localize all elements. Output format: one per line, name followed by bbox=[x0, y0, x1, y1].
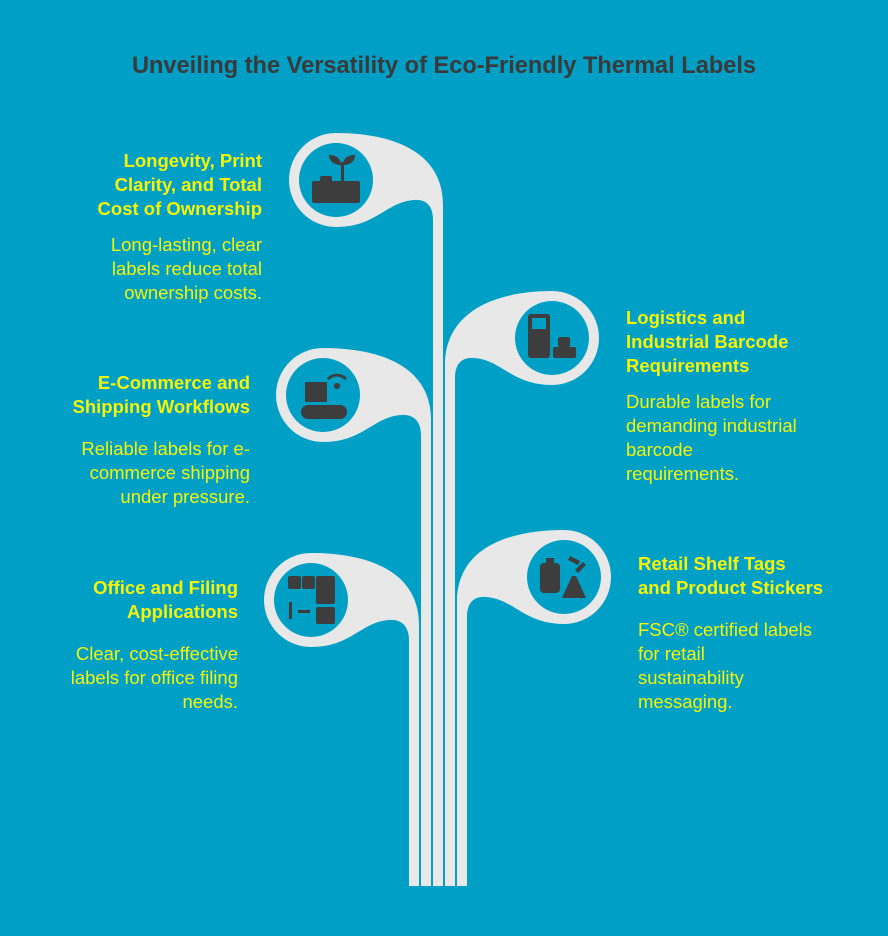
text: longevity bbox=[98, 150, 262, 303]
text: longevity: Cost of Ownership bbox=[98, 198, 262, 219]
text: longevity: Clarity, and Total bbox=[115, 174, 262, 195]
icon: kiosk bbox=[528, 314, 576, 358]
text: logistics: demanding industrial bbox=[626, 415, 797, 436]
title: Unveiling the Versatility of Eco-Friendly Thermal Labels bbox=[132, 53, 756, 79]
text: office: Clear, cost-effective bbox=[76, 643, 238, 664]
text: logistics: Requirements bbox=[626, 355, 749, 376]
icon: retail bbox=[540, 556, 586, 598]
text: office: Applications bbox=[127, 601, 238, 622]
text: office: labels for office filing bbox=[71, 667, 238, 688]
icon: office bbox=[288, 576, 335, 624]
text: office bbox=[71, 577, 238, 712]
stem: logistics bbox=[445, 291, 599, 886]
text: e-commerce: under pressure. bbox=[120, 486, 250, 507]
text: retail: for retail bbox=[638, 643, 705, 664]
text: e-commerce: Reliable labels for e- bbox=[81, 438, 250, 459]
text: logistics bbox=[626, 307, 797, 484]
text: retail: and Product Stickers bbox=[638, 577, 823, 598]
text: longevity: ownership costs. bbox=[124, 282, 262, 303]
icon: conveyor wifi bbox=[301, 374, 347, 419]
stem: office bbox=[264, 553, 419, 886]
text: logistics: barcode bbox=[626, 439, 693, 460]
text: e-commerce: commerce shipping bbox=[90, 462, 250, 483]
text: logistics: Logistics and bbox=[626, 307, 745, 328]
text: retail bbox=[638, 553, 823, 712]
text: logistics: Durable labels for bbox=[626, 391, 771, 412]
text: retail: FSC® certified labels bbox=[638, 619, 812, 640]
text: retail: Retail Shelf Tags bbox=[638, 553, 786, 574]
text: e-commerce: E-Commerce and bbox=[98, 372, 250, 393]
text: longevity: labels reduce total bbox=[112, 258, 262, 279]
stem: retail bbox=[457, 530, 611, 886]
text: e-commerce: Shipping Workflows bbox=[73, 396, 250, 417]
text: longevity: Longevity, Print bbox=[124, 150, 262, 171]
icon: plant bbox=[312, 155, 360, 203]
text: office: needs. bbox=[182, 691, 238, 712]
text: retail: sustainability bbox=[638, 667, 744, 688]
stem: e-commerce bbox=[276, 348, 431, 886]
text: retail: messaging. bbox=[638, 691, 733, 712]
text: logistics: requirements. bbox=[626, 463, 739, 484]
text: logistics: Industrial Barcode bbox=[626, 331, 788, 352]
text: e-commerce bbox=[73, 372, 250, 507]
text: office: Office and Filing bbox=[93, 577, 238, 598]
stem: longevity bbox=[289, 133, 443, 886]
text: longevity: Long-lasting, clear bbox=[111, 234, 262, 255]
